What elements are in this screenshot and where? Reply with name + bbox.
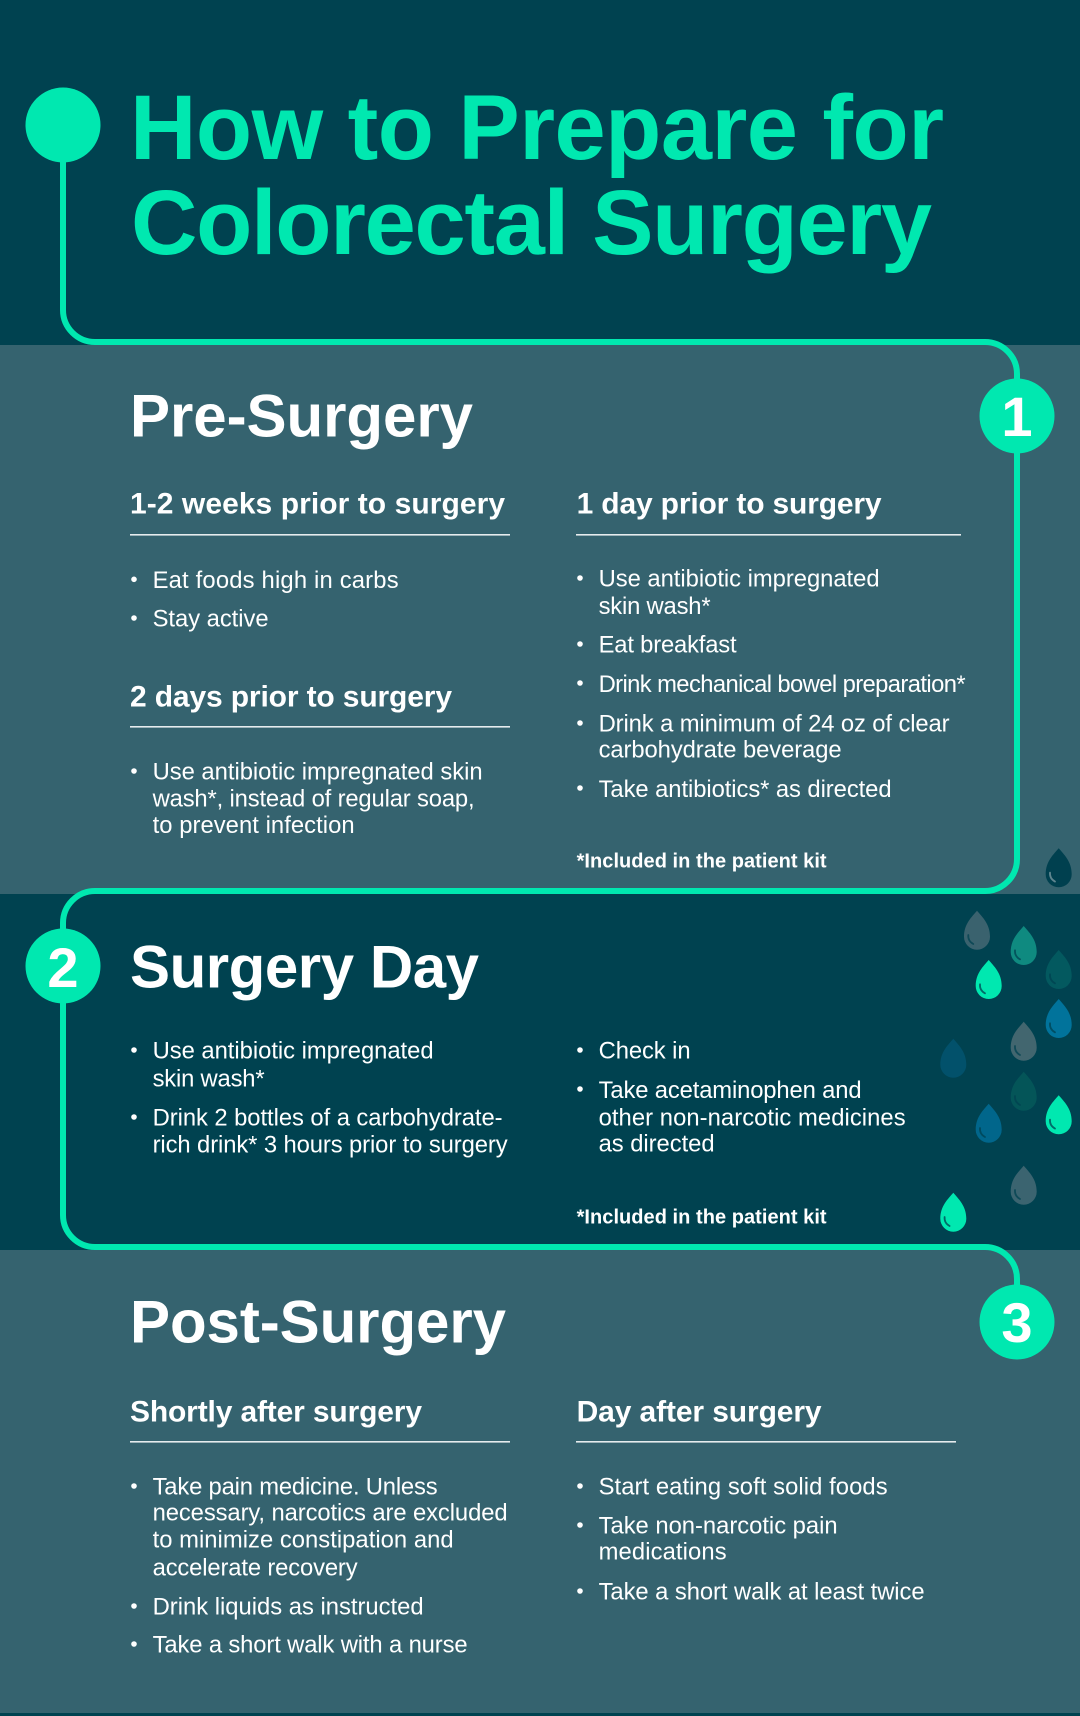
- subsection: 1 day prior to surgery: carbohydrate beverage: [599, 736, 842, 763]
- step number 3: 3: [1001, 1291, 1033, 1354]
- subsection: day after surgery: [576, 1396, 956, 1605]
- title: [130, 77, 944, 274]
- step number 1: [980, 378, 1054, 454]
- subsection: shortly after surgery: Drink liquids as instructed: [153, 1593, 424, 1620]
- subsection: shortly after surgery: [130, 1396, 510, 1658]
- list: right column: Check in: [599, 1037, 691, 1064]
- subsection: shortly after surgery: Take pain medicine. Unless: [153, 1473, 438, 1500]
- subsection: 1 day prior to surgery: Use antibiotic impregnated: [599, 566, 880, 593]
- timeline connector line: [63, 125, 1017, 1322]
- step number 1: 1: [1001, 385, 1033, 448]
- panel: surgery day: [26, 928, 906, 1228]
- subsection: 1-2 weeks prior to surgery: 1-2 weeks prior to surgery: [130, 488, 505, 520]
- subsection: 2 days prior to surgery: Use antibiotic impregnated skin: [153, 758, 483, 785]
- step number 3: [980, 1284, 1054, 1360]
- subsection: day after surgery: Take non-narcotic pain: [599, 1512, 838, 1539]
- heading: surgery day: Surgery Day: [130, 934, 480, 1001]
- panel: post-surgery: [130, 1284, 1054, 1658]
- subsection: shortly after surgery: accelerate recovery: [153, 1554, 358, 1581]
- subsection: 1-2 weeks prior to surgery: [130, 488, 510, 632]
- subsection: day after surgery: Start eating soft solid foods: [599, 1473, 888, 1500]
- step number 2: 2: [47, 936, 79, 999]
- list: right column: as directed: [599, 1130, 715, 1157]
- subsection: shortly after surgery: Shortly after surgery: [130, 1396, 422, 1428]
- subsection: 1 day prior to surgery: skin wash*: [599, 593, 711, 620]
- list: left column: Drink 2 bottles of a carbohydrate-: [153, 1104, 503, 1131]
- subsection: 1-2 weeks prior to surgery: Eat foods high in carbs: [153, 567, 399, 594]
- subsection: 1 day prior to surgery: Eat breakfast: [599, 631, 737, 658]
- background: pre-surgery band: [0, 345, 1080, 894]
- list: right column: other non-narcotic medicines: [599, 1104, 906, 1131]
- list: left column: [131, 1037, 508, 1158]
- subsection: shortly after surgery: necessary, narcotics are excluded: [153, 1499, 508, 1526]
- list: right column: [577, 1037, 906, 1157]
- subsection: day after surgery: Take a short walk at least twice: [599, 1578, 925, 1605]
- title: How to Prepare for: [130, 77, 944, 179]
- list: left column: rich drink* 3 hours prior to surgery: [153, 1131, 508, 1158]
- footnote: surgery day: *Included in the patient kit: [577, 1206, 827, 1228]
- background: header band: [0, 0, 1080, 345]
- list: left column: skin wash*: [153, 1065, 265, 1092]
- subsection: 2 days prior to surgery: wash*, instead of regular soap,: [152, 786, 475, 813]
- heading: post-surgery: Post-Surgery: [130, 1289, 507, 1356]
- subsection: shortly after surgery: to minimize constipation and: [153, 1526, 454, 1553]
- panel: pre-surgery: [130, 378, 1054, 872]
- list: right column: Take acetaminophen and: [599, 1077, 862, 1104]
- title start dot: [26, 88, 100, 162]
- subsection: 2 days prior to surgery: to prevent infection: [153, 812, 355, 839]
- subsection: 1 day prior to surgery: Drink a minimum of 24 oz of clear: [599, 710, 950, 737]
- subsection: 1 day prior to surgery: Take antibiotics* as directed: [599, 776, 892, 803]
- footnote: pre-surgery: *Included in the patient kit: [577, 850, 827, 872]
- background: post-surgery band: [0, 1250, 1080, 1713]
- subsection: 1 day prior to surgery: 1 day prior to surgery: [577, 488, 882, 520]
- subsection: 1 day prior to surgery: Drink mechanical bowel preparation*: [599, 671, 966, 698]
- background: surgery day band: [0, 894, 1080, 1250]
- subsection: 1-2 weeks prior to surgery: Stay active: [153, 605, 269, 632]
- step number 2: [26, 928, 100, 1004]
- subsection: 2 days prior to surgery: 2 days prior to surgery: [130, 680, 452, 714]
- subsection: 1 day prior to surgery: [576, 488, 966, 803]
- list: left column: Use antibiotic impregnated: [153, 1037, 434, 1064]
- subsection: shortly after surgery: Take a short walk with a nurse: [153, 1631, 468, 1658]
- subsection: day after surgery: Day after surgery: [577, 1396, 822, 1428]
- heading: pre-surgery: Pre-Surgery: [130, 383, 474, 450]
- subsection: 2 days prior to surgery: [130, 680, 510, 839]
- icon: water drops: [940, 848, 1072, 1232]
- subsection: day after surgery: medications: [599, 1539, 727, 1566]
- title: Colorectal Surgery: [131, 172, 932, 274]
